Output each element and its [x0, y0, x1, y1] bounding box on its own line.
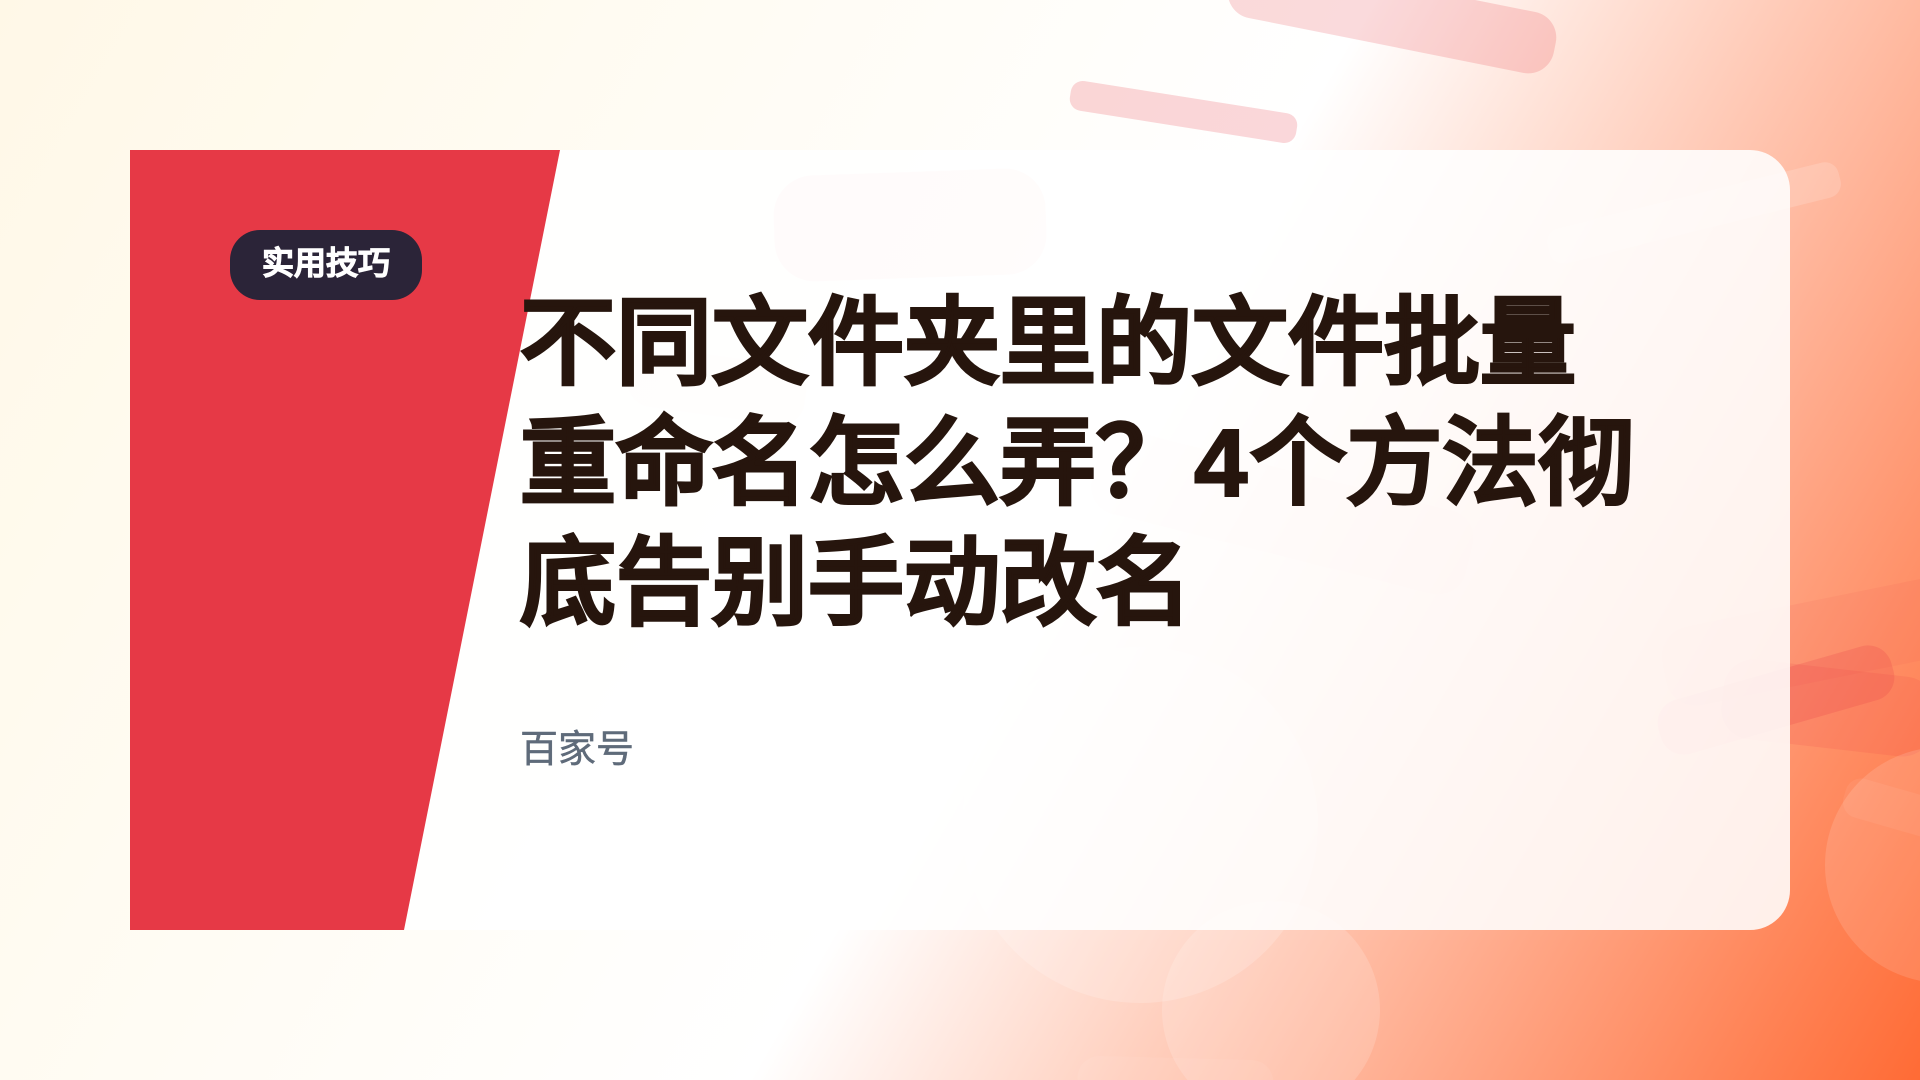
title	[520, 290, 1634, 637]
category tag	[230, 230, 422, 300]
source label: 百家号	[520, 729, 634, 771]
title: 底告别手动改名	[520, 530, 1192, 637]
category tag: 实用技巧	[262, 245, 390, 281]
title: 不同文件夹里的文件批量	[520, 290, 1576, 397]
panel: white content card	[130, 150, 1790, 930]
title: 重命名怎么弄？4个方法彻	[520, 410, 1634, 517]
panel: red slanted accent	[130, 150, 560, 930]
